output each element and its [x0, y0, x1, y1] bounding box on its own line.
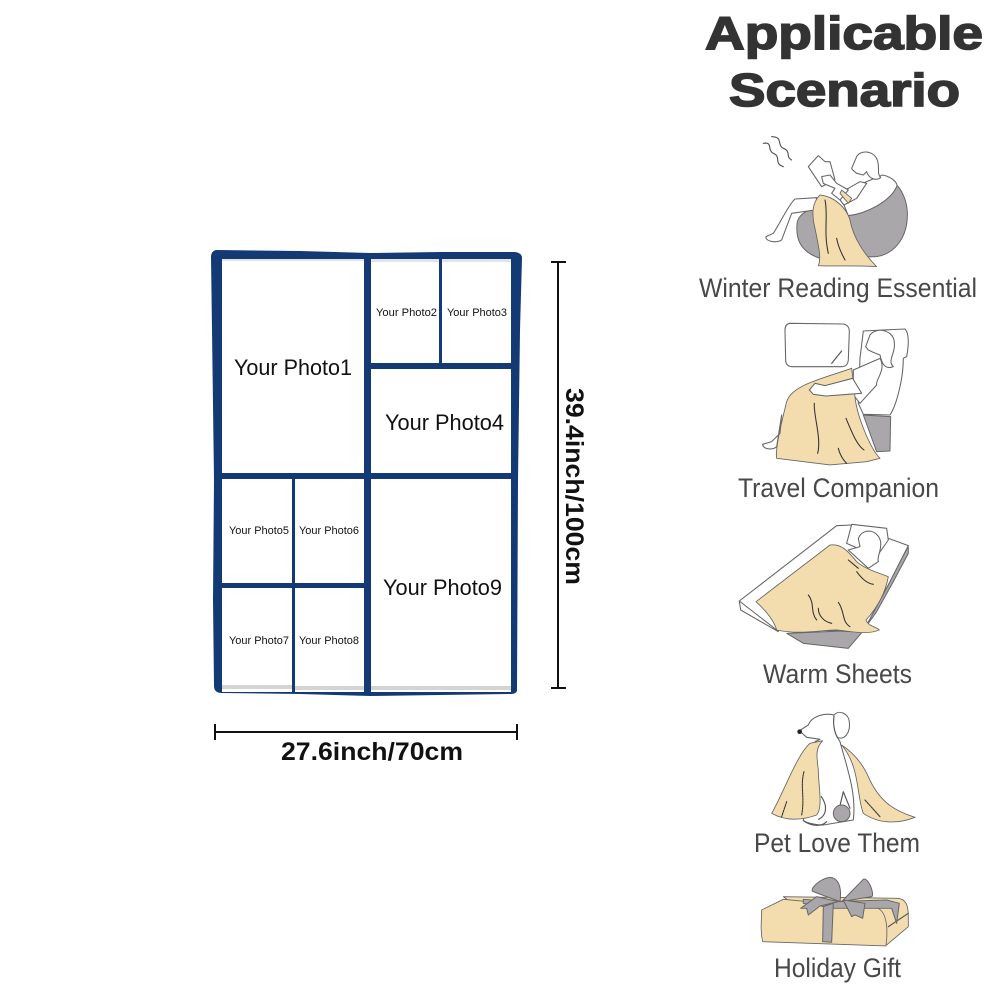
slot 5: [222, 479, 292, 583]
slot 3: [442, 259, 511, 363]
photo label 5: Your Photo5: [229, 525, 289, 537]
photo label 7: Your Photo7: [229, 635, 289, 647]
height dimension arrow: [551, 262, 566, 688]
label: pet love them: Pet Love Them: [754, 828, 920, 858]
slot 4: [371, 369, 511, 473]
label: winter reading: Winter Reading Essential: [699, 273, 977, 303]
icon: gift box with ribbon: [761, 877, 908, 946]
title: Applicable: [705, 7, 983, 59]
slot 1: [222, 259, 364, 473]
photo label 8: Your Photo8: [299, 635, 359, 647]
slot 6: [295, 479, 364, 583]
slot 2: [371, 259, 439, 363]
height label: 39.4inch/100cm: [560, 388, 588, 585]
slot 8: [295, 588, 364, 692]
photo label 2: Your Photo2: [376, 307, 437, 319]
photo label 3: Your Photo3: [447, 307, 507, 319]
photo label 9: Your Photo9: [383, 575, 502, 600]
lower fabric shadow: [222, 685, 511, 690]
blanket template with nine photo slots: [211, 250, 522, 696]
title: Scenario: [729, 64, 960, 116]
title: [705, 7, 983, 116]
icon: dog under blanket: [772, 712, 915, 825]
width label: 27.6inch/70cm: [281, 738, 463, 766]
label: warm sheets: Warm Sheets: [763, 659, 912, 689]
blanket navy border: [211, 250, 522, 696]
slot 7: [222, 588, 292, 692]
label: travel companion: Travel Companion: [738, 473, 939, 503]
icon: bed with blanket: [739, 524, 908, 648]
photo label 4: Your Photo4: [385, 410, 504, 435]
icon: travel seat with blanket: [763, 323, 908, 465]
photo label 6: Your Photo6: [299, 525, 359, 537]
icon: reading in a bean bag with blanket: [763, 137, 907, 267]
photo label 1: Your Photo1: [234, 355, 352, 380]
label: holiday gift: Holiday Gift: [774, 953, 901, 983]
width dimension arrow: [215, 724, 517, 740]
slot 9: [371, 479, 511, 692]
upper fabric shadow: [222, 259, 511, 262]
